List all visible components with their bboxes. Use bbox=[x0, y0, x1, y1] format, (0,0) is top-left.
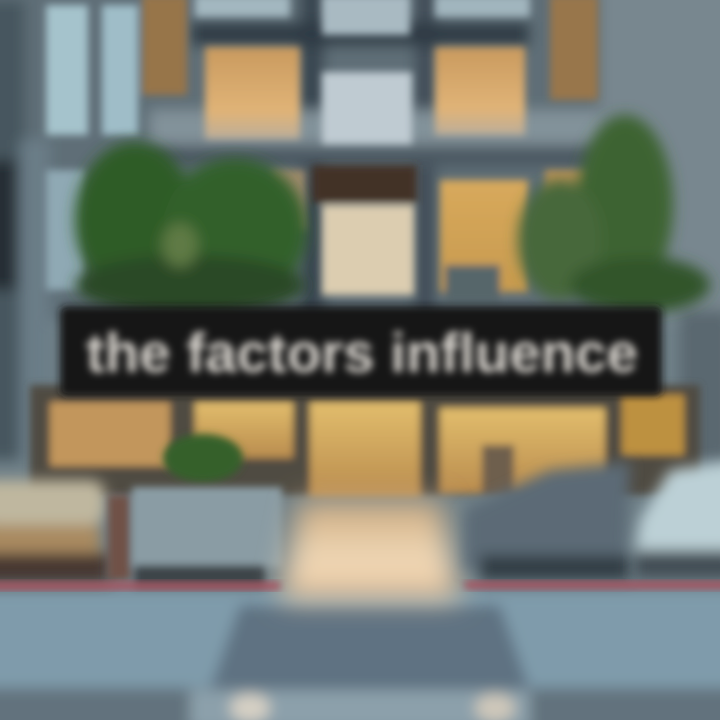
entrance glow bbox=[280, 500, 460, 600]
lower shopfront windows bbox=[30, 385, 700, 497]
upper windows bbox=[46, 0, 598, 290]
planter bbox=[108, 487, 282, 587]
banner heading: the factors influence bbox=[86, 321, 638, 384]
car: grey bbox=[465, 462, 630, 580]
banner background bbox=[60, 306, 662, 396]
left tree bbox=[75, 142, 307, 315]
street level cars and planters bbox=[0, 460, 720, 600]
car: white bbox=[635, 460, 720, 578]
right tree bbox=[518, 115, 710, 313]
banner bbox=[60, 306, 662, 396]
car: left bbox=[0, 480, 110, 583]
pavement bbox=[0, 590, 720, 720]
middle windows bbox=[270, 165, 590, 303]
shrub bbox=[163, 434, 243, 482]
background building facade bbox=[0, 0, 720, 460]
kerb line bbox=[0, 581, 720, 590]
